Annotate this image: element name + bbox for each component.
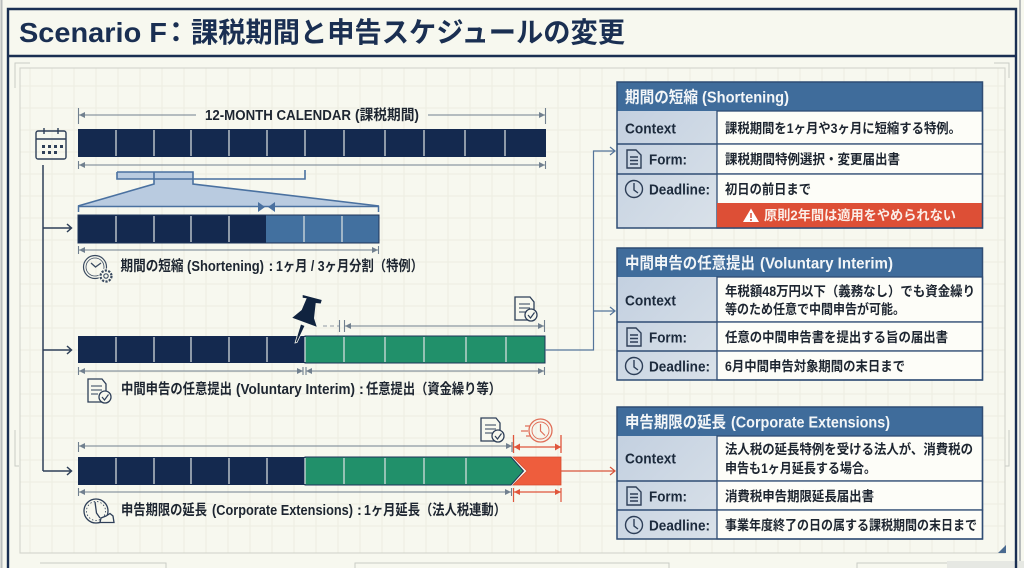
dimension line	[78, 108, 546, 124]
context row: Context	[625, 120, 676, 138]
panel: shortening	[617, 82, 982, 228]
form row	[627, 487, 641, 505]
connector: interim to panels	[545, 147, 615, 350]
panel: voluntary interim: 任意の中間申告書を提出する旨の届出書	[725, 329, 948, 345]
upper dimension	[78, 442, 512, 452]
icon: clock with hand	[84, 499, 114, 523]
icon: document check caption	[88, 379, 111, 403]
form row	[627, 150, 641, 168]
form row	[627, 328, 641, 346]
arrow: to interim panel	[594, 307, 615, 315]
extension caption: 1ヶ月延長（法人税連動）	[364, 501, 506, 519]
context row: Context	[625, 292, 676, 310]
shortening caption: 期間の短縮	[120, 257, 184, 275]
panel header	[617, 248, 982, 277]
title: ：	[162, 17, 190, 48]
arrow: to voluntary interim	[43, 346, 72, 354]
icon: clock with gear	[84, 256, 114, 284]
title: 課税期間と申告スケジュールの変更	[191, 17, 625, 48]
panel header	[617, 407, 982, 436]
panel: shortening: 期間の短縮	[625, 88, 698, 106]
panel: corporate extensions: 申告期限の延長	[625, 414, 726, 432]
arrow: to shortening	[43, 224, 72, 232]
extension block	[513, 457, 561, 485]
shortening caption: (Shortening)	[187, 259, 264, 275]
panel: shortening: Deadline:	[649, 182, 710, 198]
deadline row	[626, 516, 642, 534]
extension caption: (Corporate Extensions)	[212, 503, 353, 519]
interim caption: 中間申告の任意提出	[121, 380, 232, 398]
panel: voluntary interim: (Voluntary Interim)	[760, 256, 893, 272]
panel: voluntary interim: Deadline:	[649, 358, 710, 376]
lower dimensions	[78, 488, 512, 496]
panel: corporate extensions: 事業年度終了の日の属する課税期間の末日まで	[725, 517, 977, 533]
voluntary interim timeline	[78, 295, 545, 403]
panel: corporate extensions: 消費税申告期限延長届出書	[725, 488, 874, 504]
warning bar	[717, 203, 982, 228]
12-month calendar timeline	[78, 107, 546, 169]
panel: shortening: 初日の前日まで	[725, 181, 811, 197]
interim caption: (Voluntary Interim)	[236, 382, 355, 398]
panel: shortening: (Shortening)	[702, 90, 789, 106]
panel: corporate extensions: Deadline:	[649, 518, 710, 534]
interim bar	[78, 336, 305, 363]
panel: voluntary interim: 6月中間申告対象期間の末日まで	[725, 358, 905, 374]
red dimension	[514, 435, 561, 453]
zoom funnel	[78, 179, 379, 206]
panel: corporate extensions: 法人税の延長特例を受ける法人が、消費税の	[725, 441, 973, 457]
bracket with arrows	[78, 206, 378, 212]
extension caption: :	[357, 503, 362, 519]
arrow: extension to panel	[561, 467, 615, 475]
panel: shortening: Form:	[649, 152, 687, 168]
12-month bar	[78, 129, 546, 157]
context row: Context	[625, 450, 676, 468]
panel: voluntary interim: 年税額48万円以下（義務なし）でも資金繰り	[725, 283, 975, 299]
upper dimension	[323, 325, 339, 327]
interim caption: :	[359, 382, 364, 398]
panel: corporate extensions: (Corporate Extensions)	[731, 414, 890, 432]
calendar label: 12-MONTH CALENDAR	[205, 108, 351, 124]
lower dimension	[78, 367, 544, 375]
shortening caption: :	[268, 259, 273, 275]
panel: voluntary interim: Form:	[649, 330, 687, 346]
panel: corporate extensions: Form:	[649, 488, 687, 506]
panel: shortening: 課税期間を1ヶ月や3ヶ月に短縮する特例。	[725, 120, 961, 136]
panel: voluntary interim	[617, 248, 982, 380]
panel header	[617, 82, 982, 111]
icon: document check	[481, 418, 504, 442]
corporate extensions timeline	[78, 418, 561, 523]
deadline row	[626, 180, 642, 198]
shortening timeline	[78, 170, 423, 284]
panel: shortening: 課税期間特例選択・変更届出書	[725, 151, 900, 167]
icon: document check top	[515, 297, 537, 321]
panel: corporate extensions	[617, 407, 982, 539]
extension caption: 申告期限の延長	[121, 501, 207, 519]
panel: voluntary interim: 中間申告の任意提出	[625, 254, 755, 272]
panel: shortening: 原則2年間は適用をやめられない	[764, 207, 956, 223]
extension bar	[78, 457, 305, 485]
arrow: to corporate extensions	[43, 467, 72, 475]
deadline row	[626, 358, 642, 374]
icon: fast clock	[521, 419, 552, 442]
panel: voluntary interim: 等のため任意で中間申告が可能。	[725, 301, 905, 317]
shortening caption: 1ヶ月 / 3ヶ月分割（特例）	[276, 258, 423, 275]
title: Scenario F	[19, 17, 167, 48]
icon: calendar	[36, 128, 66, 159]
panel: corporate extensions: 申告も1ヶ月延長する場合。	[725, 460, 876, 476]
calendar label: (課税期間)	[355, 107, 419, 124]
connector: calendar to timelines	[43, 165, 72, 475]
interim caption: 任意提出（資金繰り等）	[366, 380, 501, 398]
shortening bar	[78, 215, 266, 243]
icon: push pin	[292, 295, 322, 343]
arrow: to shortening panel	[610, 147, 615, 155]
